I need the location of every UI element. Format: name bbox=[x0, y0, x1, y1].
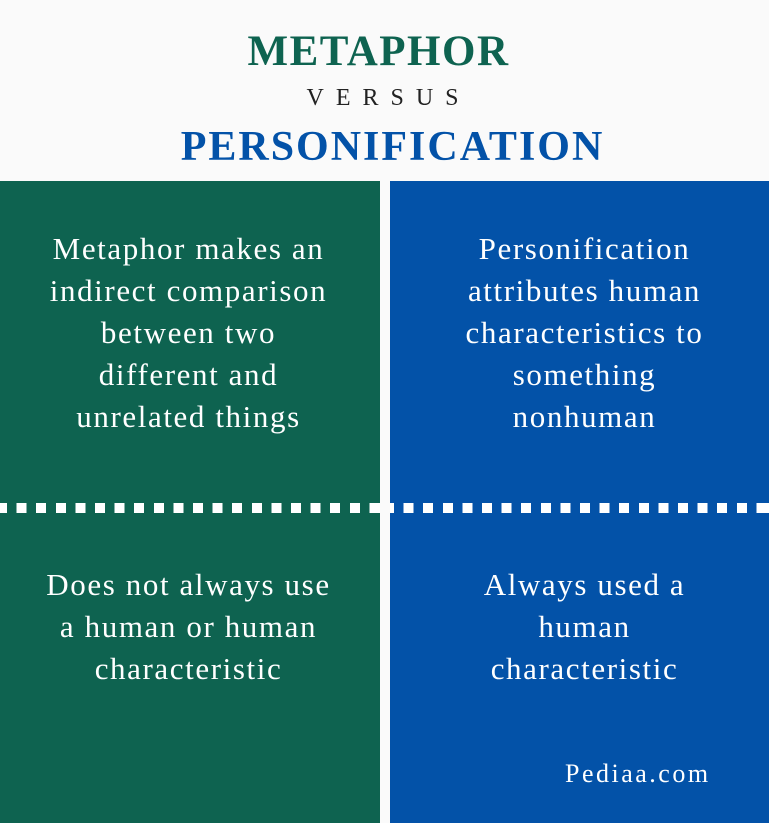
panel: personification bbox=[390, 181, 769, 823]
title: metaphor: METAPHOR bbox=[247, 28, 510, 75]
text: metaphor definition: between two bbox=[101, 315, 276, 350]
subtitle: versus: VERSUS bbox=[306, 85, 471, 111]
text: metaphor human: characteristic bbox=[95, 651, 282, 686]
text: metaphor human: Does not always use bbox=[46, 567, 331, 602]
text: personification definition: characteristics to bbox=[466, 315, 703, 350]
panel: metaphor bbox=[0, 181, 380, 823]
text: metaphor definition: different and bbox=[99, 357, 278, 392]
text: metaphor human bbox=[46, 567, 331, 686]
text: metaphor definition: indirect comparison bbox=[50, 273, 327, 308]
text: metaphor definition: unrelated things bbox=[76, 399, 301, 434]
text: personification definition: attributes human bbox=[468, 273, 701, 308]
text: personification human bbox=[484, 567, 685, 686]
text: metaphor definition: Metaphor makes an bbox=[53, 231, 324, 266]
text: metaphor definition bbox=[50, 231, 327, 434]
text: personification human: human bbox=[538, 609, 631, 644]
text: personification definition: something bbox=[513, 357, 656, 392]
text: metaphor human: a human or human bbox=[60, 609, 317, 644]
title: personification: PERSONIFICATION bbox=[181, 124, 604, 170]
text: personification definition: Personification bbox=[479, 231, 690, 266]
text: personification definition bbox=[466, 231, 703, 434]
logo: pediaa.com: Pediaa.com bbox=[565, 759, 711, 788]
text: personification human: characteristic bbox=[491, 651, 678, 686]
text: personification human: Always used a bbox=[484, 567, 685, 602]
text: personification definition: nonhuman bbox=[513, 399, 656, 434]
